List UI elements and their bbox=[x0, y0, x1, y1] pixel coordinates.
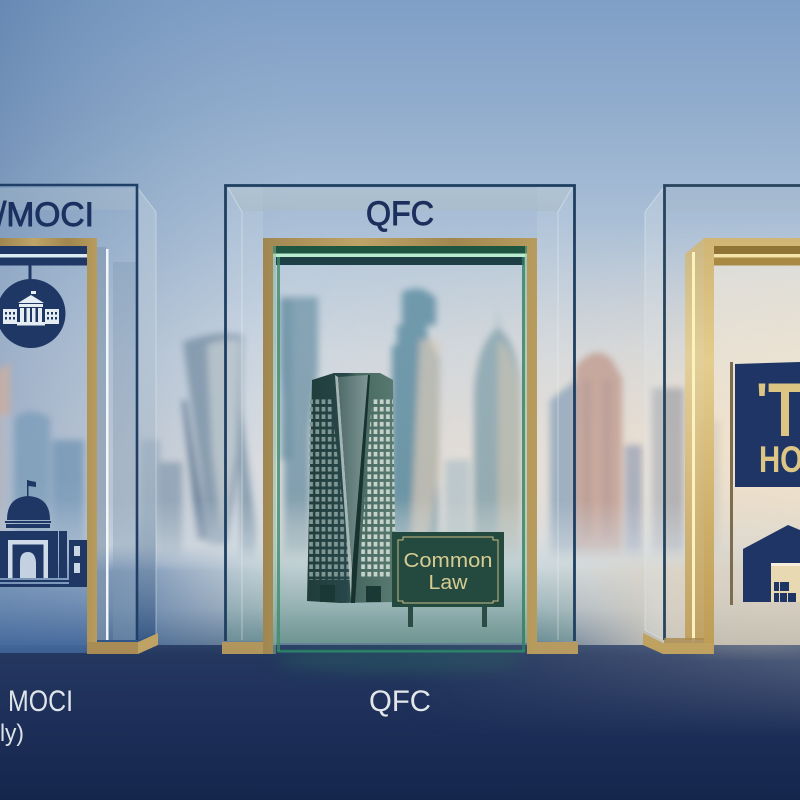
caption: bottom note: ly) bbox=[0, 720, 24, 747]
left glass dark frame edge bbox=[0, 185, 137, 640]
right lit strip bbox=[692, 252, 695, 642]
left lit strip bbox=[106, 249, 108, 641]
banner bbox=[735, 362, 800, 487]
right glass dark frame bbox=[664, 186, 800, 640]
centre door interior tint bbox=[275, 265, 525, 643]
left glass top strip bbox=[0, 188, 136, 210]
right gold frame bbox=[704, 238, 800, 654]
centre glass left pane bbox=[226, 187, 263, 641]
centre header bars bbox=[273, 246, 527, 265]
left glass inner column bbox=[113, 262, 136, 640]
banner: ' bbox=[756, 373, 768, 429]
caption: MOCI bottom: MOCI bbox=[8, 685, 73, 718]
right glass side pane bbox=[645, 187, 664, 640]
left door interior tint bbox=[0, 265, 87, 653]
centre left base bbox=[222, 642, 263, 654]
sign: Common Law: Law bbox=[428, 572, 468, 594]
caption: QFC bottom: QFC bbox=[369, 685, 431, 718]
left door header bars bbox=[0, 246, 87, 266]
heading: QFC top: QFC bbox=[366, 195, 434, 233]
panel: free zone door (right) bbox=[643, 186, 800, 654]
background sky bbox=[0, 0, 800, 562]
lit floor band bbox=[0, 548, 743, 645]
centre glass top strip bbox=[228, 188, 572, 211]
icon: QFC tower bbox=[307, 373, 396, 603]
icon: hanging government badge bbox=[0, 265, 66, 348]
left gold frame bbox=[0, 238, 97, 654]
right gold side bbox=[685, 238, 704, 640]
centre glass inner edges bbox=[228, 188, 572, 640]
icon: domed ministry building bbox=[0, 480, 87, 587]
right door interior tint bbox=[714, 265, 800, 645]
left glass side pane bbox=[137, 187, 156, 648]
centre green light strips bbox=[273, 246, 527, 654]
centre glass dark frame bbox=[226, 186, 574, 641]
right glass top strip bbox=[666, 188, 800, 212]
centre right base bbox=[537, 642, 578, 654]
ground haze bbox=[0, 500, 800, 570]
right gold base bbox=[643, 633, 713, 654]
icon: warehouse bbox=[743, 525, 800, 602]
flag pole bbox=[730, 362, 733, 605]
left strip backing bbox=[97, 247, 106, 642]
panel: MOCI door (left) bbox=[0, 185, 158, 747]
left gold base bbox=[87, 633, 158, 654]
dark navy floor bbox=[0, 640, 800, 800]
sign: Common Law bbox=[392, 532, 504, 627]
sign: Common Law: Common bbox=[404, 550, 492, 572]
centre gold frame bbox=[263, 238, 537, 654]
right door header bars bbox=[714, 246, 800, 266]
panel: QFC door (centre) bbox=[222, 186, 578, 718]
blurred city skyline bbox=[0, 288, 720, 560]
centre glass right pane bbox=[537, 187, 574, 641]
